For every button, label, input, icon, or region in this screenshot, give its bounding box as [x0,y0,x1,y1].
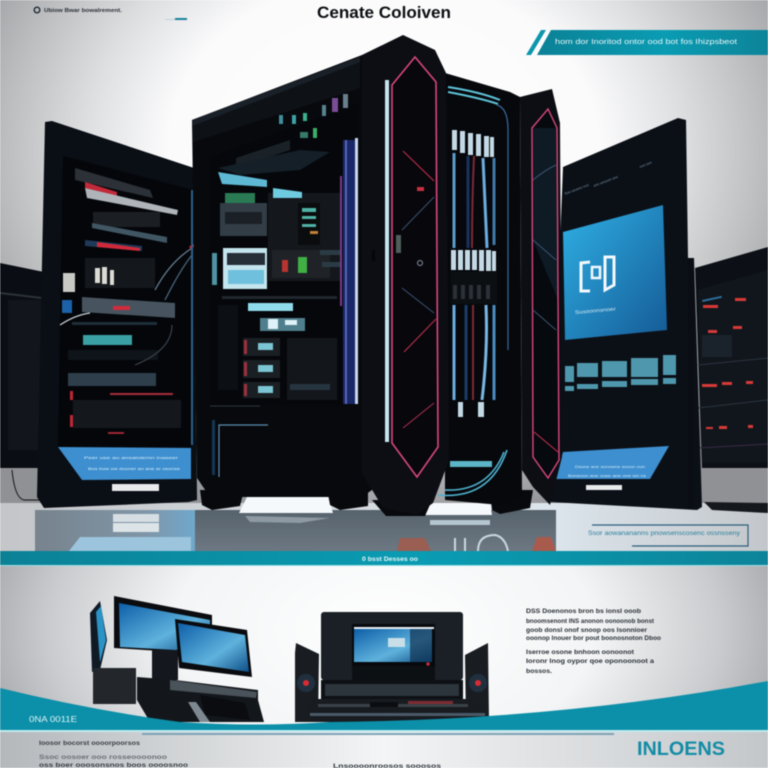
far right background panel [695,247,768,513]
lower-right text block: bossos. [526,668,552,675]
screen [563,205,667,340]
right speaker [465,643,489,722]
blue caption box [556,446,669,479]
hardware shelves [62,168,181,434]
vertical blue light [343,140,358,404]
front door panel [362,35,449,515]
footer text left: Ioosor bocorst oooorpoorsos [39,741,141,747]
computer tower [93,668,136,704]
right cabinet panel: Sussonnsnoer [575,306,616,316]
lower-center workstation [295,612,489,722]
lower-left monitors and desk [90,596,264,722]
teal divider band [0,551,768,566]
background: upper section [0,0,768,552]
right cabinet panel: Bonsoon ane oose ane one wn ns [568,474,646,478]
tower side body [192,55,372,497]
cables [60,245,194,365]
lower-right text block: Ioronr Inog oypor qoe oponoonoot a [526,658,655,665]
right caption outline box on floor [588,525,748,546]
lower cooling loops [438,450,507,495]
right cabinet panel [550,118,702,510]
right cabinet panel: Dsone ane sonowne sooon oon [575,465,645,469]
left cabinet panel: Bos bow ow dooner an ane ar osonse [88,466,181,471]
tower feet [200,490,533,516]
cooling loops top [448,87,508,350]
side window interior [210,104,358,405]
title: Cenate Coloiven [317,3,451,22]
footer text left [39,741,188,768]
teal wave: 0NA 0011E [29,715,77,724]
door accent lines [402,151,436,428]
lower-right text block: goob donsl onof snoop oos lsonnioer [526,627,648,634]
header: small accent dash [165,18,187,20]
right caption outline box on floor: Ssor aowanananns pnowsenscosenc ossnsseny [588,531,740,537]
left speaker [295,643,319,722]
top micro text: oon sen [639,161,652,169]
top micro text: Sne seoees nos [564,183,590,196]
top-right teal banner: hom dor Inoritod ontor ood bot fos Ihizpsbeot [555,39,737,46]
door light stripe [385,80,389,442]
background: lower section [0,566,768,732]
central tower [192,35,562,516]
blue caption box [58,447,191,480]
lower-right text block [526,608,661,675]
floor with reflections [0,497,768,552]
components [212,150,340,400]
footer rule [0,730,768,735]
footer background [0,732,768,768]
logo: INLOENS [637,739,725,760]
lower shroud [210,406,360,478]
keyboard [321,680,463,699]
cables [454,153,494,400]
footer text left: Ssoc oosoer ooo rosseoooonoo [39,755,167,761]
label strip [112,484,159,491]
top-right teal banner [526,30,768,55]
header: top-left note: Ubiow Bwar bowalrement. [44,8,123,14]
header: top-left note [34,7,123,14]
thumbnails [565,355,676,391]
top status LEDs [236,94,348,168]
far left background panel [0,263,44,500]
narrow side monitor [90,601,107,672]
teal divider band: 0 bsst Desses oo [362,556,418,563]
screen icon [581,257,614,291]
label strip [586,485,622,490]
small monitor [175,619,252,677]
lower-right text block: DSS Doenonos bron bs ionsl ooob [526,608,641,615]
left cabinet panel: Peer use au ansaiolemn inaseer [84,455,179,460]
desk and keyboard [137,677,264,722]
lower-right text block: bnoomsenont INS anonon oonoonob bonst [526,618,654,625]
display [352,624,435,666]
rear narrow panel [520,89,562,505]
door pink outline [392,57,438,477]
open right bay [445,73,522,505]
top micro text: ans wnsoen anc [593,175,619,188]
deck [304,699,487,722]
large monitor [114,596,212,652]
lower-right text block: Iserroe osone bnhoon oonoonot [526,649,634,656]
top micro text [564,161,652,196]
white connector rows [451,130,496,417]
left cabinet panel [37,121,197,508]
teal wave [0,681,768,732]
lower-right text block: ooonop lnouer bor pout boonosnoton Dboo [526,635,661,642]
